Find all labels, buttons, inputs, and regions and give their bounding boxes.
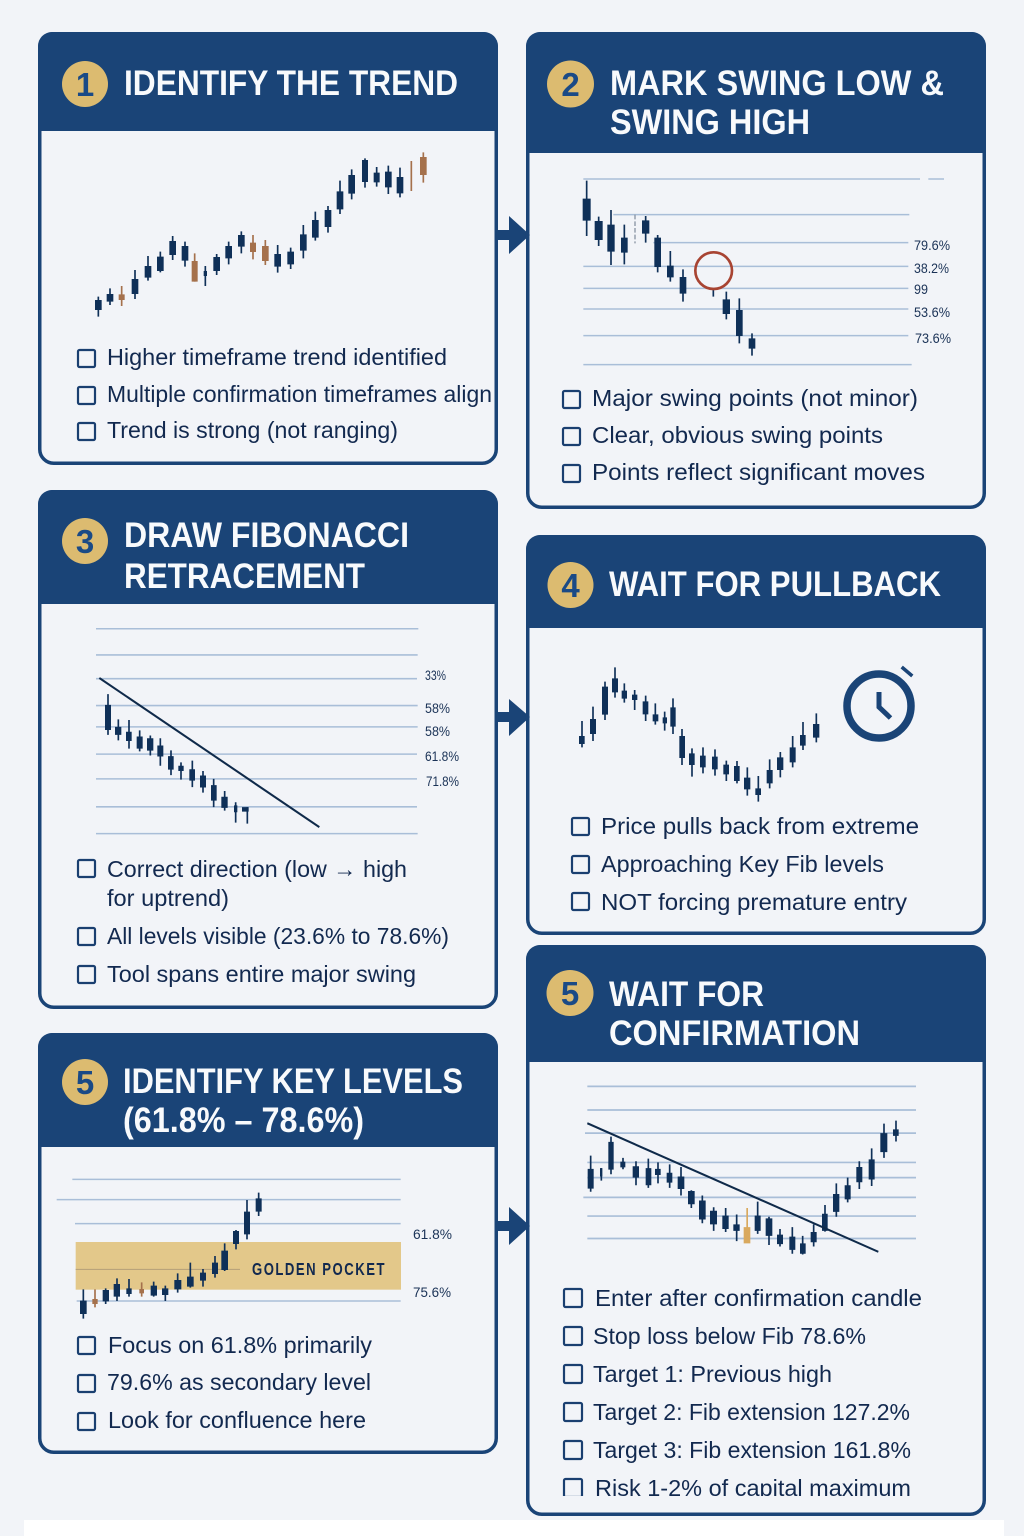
checklist: Correct direction (low → high <box>107 856 407 882</box>
checklist: Trend is strong (not ranging) <box>107 417 398 443</box>
heading: IDENTIFY KEY LEVELS <box>123 1062 463 1101</box>
candlestick chart: confirmation breakout <box>583 1086 916 1254</box>
fib level labels <box>425 667 459 789</box>
checklist: Tool spans entire major swing <box>107 961 416 987</box>
number badge 2: 2 <box>561 66 580 103</box>
heading: CONFIRMATION <box>609 1014 860 1053</box>
number badge 4 <box>548 562 594 608</box>
header band <box>38 1033 498 1147</box>
fib level labels: 38.2% <box>914 260 949 276</box>
checklist: Focus on 61.8% primarily <box>108 1332 372 1358</box>
checklist: Risk 1-2% of capital maximum <box>595 1475 911 1501</box>
header band <box>526 945 986 1062</box>
golden pocket band <box>76 1242 401 1290</box>
heading: (61.8% – 78.6%) <box>123 1101 364 1140</box>
number badge 4: 4 <box>561 567 580 604</box>
confirmation candle <box>744 1208 750 1243</box>
heading: WAIT FOR PULLBACK <box>609 565 941 604</box>
fib level labels: 79.6% <box>914 237 950 253</box>
header band <box>38 490 498 604</box>
panel: mark swing low and swing high <box>526 32 986 507</box>
retracement line <box>99 678 319 827</box>
golden pocket label: GOLDEN POCKET <box>252 1259 386 1279</box>
panel: identify the trend <box>38 32 498 463</box>
checklist: Look for confluence here <box>108 1407 366 1433</box>
checklist <box>78 856 449 987</box>
checklist: Stop loss below Fib 78.6% <box>593 1323 866 1349</box>
checklist: Approaching Key Fib levels <box>601 851 884 877</box>
number badge 5: 5 <box>76 1064 94 1101</box>
fib level labels: 99 <box>914 281 928 297</box>
panel: wait for pullback <box>526 535 986 933</box>
checklist <box>78 344 492 443</box>
checklist: 79.6% as secondary level <box>107 1369 371 1395</box>
checklist <box>78 1332 372 1433</box>
fib level labels: 71.8% <box>426 773 459 789</box>
number badge 5 <box>546 970 594 1016</box>
candlestick chart: fib retracement <box>96 629 418 834</box>
header band <box>526 535 986 628</box>
candlestick chart: pullback <box>579 667 819 802</box>
fib level labels <box>914 237 951 346</box>
arrow: step 3 to 4 <box>498 699 530 736</box>
heading: MARK SWING LOW & <box>610 64 944 103</box>
number badge 1 <box>62 61 108 107</box>
arrow: step 1 to 2 <box>498 216 530 254</box>
checklist: NOT forcing premature entry <box>601 889 908 915</box>
heading: IDENTIFY THE TREND <box>124 64 458 103</box>
checklist <box>572 813 919 915</box>
fib level labels: 58% <box>425 700 450 716</box>
checklist: Major swing points (not minor) <box>592 385 918 411</box>
fib level labels: 61.8% <box>425 748 459 764</box>
number badge 5 <box>62 1059 108 1105</box>
checklist: Target 3: Fib extension 161.8% <box>593 1437 911 1463</box>
heading: DRAW FIBONACCI <box>124 516 409 555</box>
number badge 3: 3 <box>76 523 94 560</box>
chart: golden pocket <box>57 1179 401 1319</box>
number badge 1: 1 <box>76 66 94 103</box>
checklist: Target 2: Fib extension 127.2% <box>593 1399 910 1425</box>
checklist: Price pulls back from extreme <box>601 813 919 839</box>
candlestick chart: swing points with fib levels <box>583 179 944 365</box>
checklist <box>563 385 925 485</box>
candlestick chart: uptrend <box>95 152 427 317</box>
checklist: Points reflect significant moves <box>592 459 925 485</box>
swing point circle <box>695 252 732 289</box>
level labels: 75.6% <box>413 1284 451 1300</box>
level labels <box>413 1226 452 1300</box>
header band <box>526 32 986 153</box>
header band <box>38 32 498 131</box>
heading: RETRACEMENT <box>124 557 365 596</box>
level labels: 61.8% <box>413 1226 452 1242</box>
fib level labels: 73.6% <box>915 330 951 346</box>
trend line <box>587 1123 878 1252</box>
panel: identify key levels <box>38 1033 498 1452</box>
panel: draw fibonacci retracement <box>38 490 498 1007</box>
fib level labels: 58% <box>425 723 450 739</box>
number badge 5: 5 <box>561 975 579 1012</box>
checklist <box>564 1285 922 1501</box>
checklist: Enter after confirmation candle <box>595 1285 922 1311</box>
number badge 3 <box>62 518 108 564</box>
heading: SWING HIGH <box>610 103 810 142</box>
checklist: Higher timeframe trend identified <box>107 344 447 370</box>
checklist: All levels visible (23.6% to 78.6%) <box>107 923 449 949</box>
heading: WAIT FOR <box>609 975 764 1014</box>
fib level labels: 53.6% <box>914 304 950 320</box>
icon: clock <box>847 667 912 738</box>
checklist: for uptrend) <box>107 885 229 911</box>
checklist: Target 1: Previous high <box>593 1361 832 1387</box>
number badge 2 <box>547 60 594 108</box>
checklist: Clear, obvious swing points <box>592 422 883 448</box>
fib level labels: 33% <box>425 667 446 683</box>
panel: wait for confirmation <box>526 945 986 1514</box>
checklist: Multiple confirmation timeframes align <box>107 381 492 407</box>
arrow: step 5 to 6 <box>498 1207 530 1245</box>
